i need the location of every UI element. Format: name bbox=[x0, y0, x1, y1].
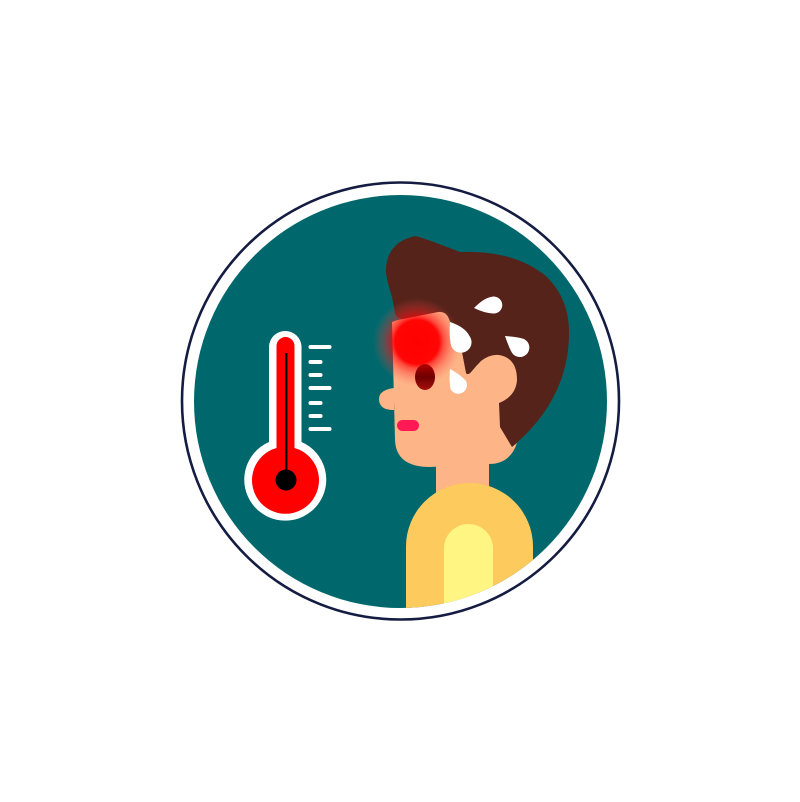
nose bbox=[379, 388, 394, 410]
thermometer mercury bbox=[252, 337, 319, 514]
red fever glow bbox=[373, 298, 461, 386]
teal disc bbox=[194, 195, 607, 608]
icon: sweat drop 4 bbox=[450, 369, 467, 394]
mouth bbox=[397, 420, 419, 431]
face and ear bbox=[392, 312, 517, 467]
shirt bbox=[406, 483, 533, 620]
person bbox=[379, 236, 569, 620]
shirt inner panel bbox=[444, 524, 493, 604]
icon: thermometer bbox=[244, 331, 330, 521]
thermometer needle bbox=[285, 353, 287, 480]
eye bbox=[415, 364, 435, 390]
infographic: person with fever bbox=[180, 181, 620, 621]
thermometer casing bbox=[244, 331, 326, 521]
icon: sweat drop 3 bbox=[505, 336, 529, 357]
hair bbox=[386, 236, 569, 447]
icon: sweat drop 2 bbox=[450, 322, 472, 353]
thermometer bulb bbox=[276, 470, 296, 490]
thermometer scale ticks bbox=[310, 347, 330, 429]
icon: sweat drop 1 bbox=[474, 297, 502, 314]
neck bbox=[436, 464, 489, 493]
outer ring bbox=[182, 182, 619, 620]
